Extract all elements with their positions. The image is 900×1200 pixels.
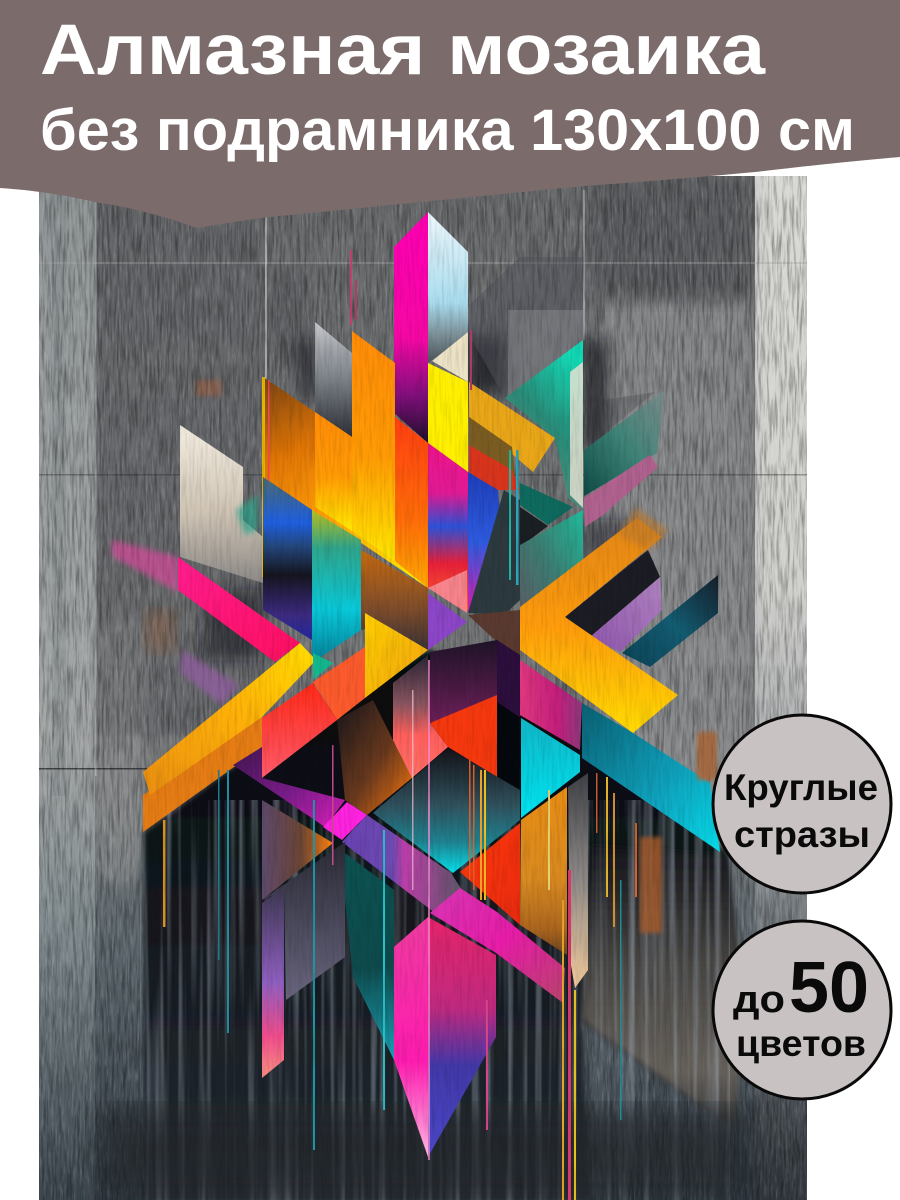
patch: rust right — [697, 732, 717, 780]
upper grey shadow shards — [469, 257, 654, 431]
shard: central teal — [345, 853, 394, 1060]
shard: central blue — [428, 917, 496, 1157]
strip: orange right — [640, 837, 662, 933]
badge: up to 50 colours: 50 — [789, 948, 869, 1028]
shard: black beside arm — [565, 550, 660, 637]
diamond: teal dark — [373, 748, 520, 873]
shard: grey — [315, 322, 352, 437]
facet: cyan quad — [521, 718, 580, 818]
badge: round rhinestones: стразы — [734, 814, 870, 855]
column: cream — [568, 773, 588, 988]
band: red patch — [469, 445, 520, 490]
title line 1: Алмазная мозаика — [40, 11, 766, 90]
shard: teal spray lower — [520, 510, 583, 610]
column: red — [395, 417, 428, 588]
crystal: cream facet — [432, 332, 468, 382]
shard: dark teal far right — [622, 575, 718, 667]
column: orange brown — [361, 550, 428, 650]
badge: up to 50 colours: цветов — [736, 1023, 866, 1064]
badge: round rhinestones: Круглые — [724, 767, 878, 808]
soft shadows behind shards — [205, 335, 635, 660]
spot: blue magenta — [468, 472, 500, 612]
band: magenta — [178, 557, 300, 662]
shard: dark strip — [520, 507, 548, 547]
crystal: magenta facet — [394, 212, 428, 443]
arm: right orange yellow — [520, 518, 678, 733]
shard: teal strip lower — [520, 483, 573, 525]
column: orange — [352, 331, 395, 561]
strip: magenta — [430, 888, 565, 1003]
shard: orange brown centre — [337, 700, 412, 815]
facet: green — [313, 653, 333, 680]
banner — [0, 0, 900, 228]
spray: rust on left wall — [144, 610, 176, 652]
arm: left orange lower — [143, 712, 262, 832]
column: gold — [520, 787, 567, 955]
column: teal cyan — [312, 510, 361, 663]
spray: teal green on cream shard — [236, 495, 258, 535]
shard: lavender — [262, 842, 345, 1000]
shard: central pink — [394, 917, 428, 1157]
shard: dark behind spot — [468, 490, 520, 615]
shard: cream edge — [570, 362, 583, 508]
shard: pink lilac right — [584, 455, 658, 527]
spray: orange glow on arm — [618, 508, 668, 550]
column: dark purple right — [497, 640, 520, 720]
band: main orange yellow — [263, 331, 468, 610]
badge: round rhinestones — [713, 715, 891, 893]
arm: left yellow — [143, 643, 316, 795]
spray: lilac lower left — [180, 650, 239, 705]
facet: gold centre — [365, 613, 428, 698]
diamond: magenta small — [323, 802, 367, 840]
concrete wall — [39, 176, 807, 1200]
crystal: ice facet — [428, 212, 468, 363]
facet: salmon pink — [428, 570, 467, 613]
shard: lilac right — [590, 577, 662, 652]
facet: pink right — [520, 660, 582, 750]
column: magenta blue red — [428, 443, 468, 610]
drips: vertical paint lines — [163, 250, 637, 1200]
drip: right edge lines — [262, 377, 518, 585]
facet: red centre — [430, 695, 497, 777]
band: cyan right — [582, 703, 720, 852]
crystal: yellow facet — [428, 363, 468, 472]
column: blue — [263, 477, 312, 640]
triangle: red — [460, 823, 520, 925]
stripe: purple pink — [262, 887, 284, 1078]
grain over artwork — [39, 176, 807, 1200]
strip: purple — [233, 747, 345, 827]
badge: up to 50 colours: до — [733, 979, 785, 1021]
panel: mosaic artwork — [39, 176, 807, 1200]
facet: orange red — [313, 647, 365, 720]
band: dark gold column — [469, 417, 516, 485]
facet: purple diamond — [428, 593, 467, 650]
badge: up to 50 colours — [713, 921, 891, 1099]
band: faint pink tail — [112, 540, 178, 592]
column: orange mid — [315, 412, 352, 531]
title line 2: без подрамника 130х100 см — [40, 98, 855, 163]
dark lower field — [100, 650, 750, 1200]
shard: teal right spray — [505, 340, 583, 510]
shard: orange purple — [262, 800, 333, 900]
facet: salmon centre — [393, 655, 448, 778]
strip: violet — [342, 815, 462, 913]
facet: dark purple centre — [430, 640, 497, 723]
spray: rust high left — [196, 380, 222, 396]
shard: left cream — [180, 425, 263, 583]
shard: dark teal right — [584, 390, 665, 496]
arm: dark under right arm — [468, 610, 520, 660]
column: black centre — [497, 702, 521, 833]
band: right gold strip — [469, 382, 555, 472]
facet: red — [262, 683, 337, 778]
